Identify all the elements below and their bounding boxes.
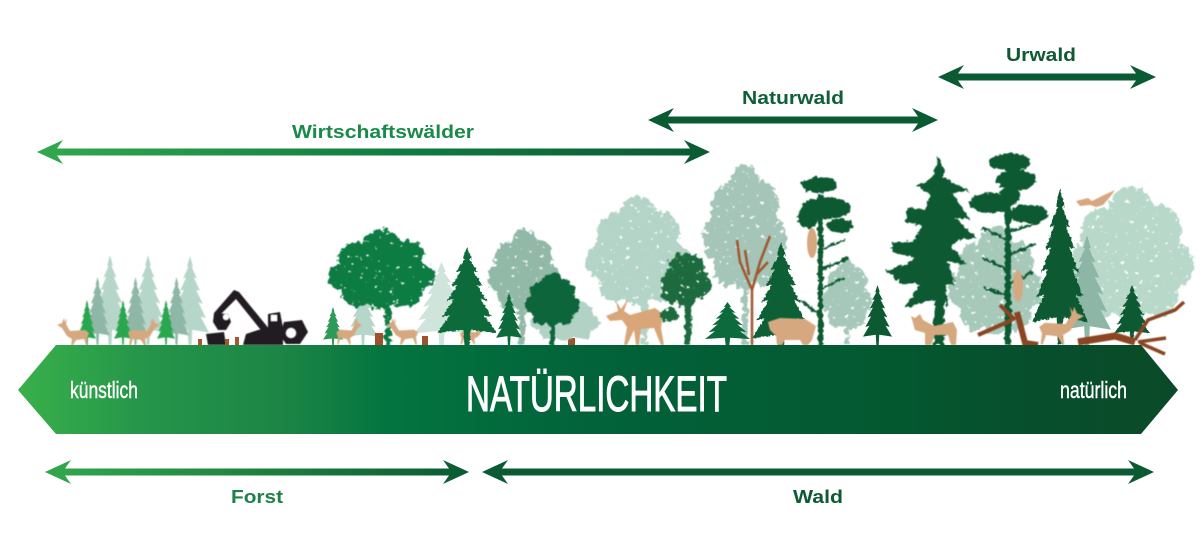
harvester machine — [206, 290, 308, 345]
fallen broken tree — [978, 305, 1038, 345]
huge pale broadleaf — [1068, 186, 1194, 322]
roe deer centre left — [336, 318, 487, 345]
arrow: Urwald range — [938, 65, 1156, 89]
heading: Urwald: Urwald — [1006, 45, 1076, 65]
pale grey broadleaf tall — [703, 164, 787, 345]
pale background conifers left — [92, 255, 209, 345]
stag — [606, 299, 664, 345]
arrow: Naturwald range — [648, 108, 938, 132]
large broadleaf tree — [328, 229, 435, 345]
forest illustration — [18, 153, 1194, 434]
pale conifer centre left — [414, 262, 469, 345]
heading: Naturwald: Naturwald — [742, 88, 844, 108]
pale conifer behind broadleaf — [348, 285, 378, 345]
small conifer — [323, 307, 343, 345]
small dark conifer — [863, 285, 892, 345]
arrow: Wald range — [482, 460, 1154, 484]
dead tree — [737, 236, 770, 345]
squirrel on pine — [807, 228, 817, 258]
mid conifer urwald — [1063, 235, 1111, 345]
heading: Forst: Forst — [231, 487, 283, 507]
dark round broadleaf — [525, 273, 580, 345]
arrow: Wirtschaftswälder range — [37, 140, 710, 164]
heading: Wald: Wald — [793, 487, 843, 507]
dark conifer centre — [437, 247, 497, 347]
squirrel on urwald pine — [1013, 270, 1023, 302]
tree stumps left — [198, 337, 239, 345]
grey broadleaf tree — [488, 229, 560, 345]
tall pine naturwald — [798, 177, 853, 345]
band label right: natürlich — [1060, 377, 1127, 403]
small conifer urwald — [1114, 285, 1150, 341]
deer urwald — [1039, 307, 1084, 344]
low spruce bush — [705, 302, 750, 345]
large pale broadleaf — [586, 196, 690, 345]
mid conifers left — [85, 277, 189, 345]
green young conifers left — [78, 300, 175, 345]
heading: Wirtschaftswälder: Wirtschaftswälder — [292, 122, 474, 142]
arrow: Forst range — [45, 460, 469, 484]
lynx — [911, 314, 957, 345]
dark spruce urwald — [1032, 188, 1088, 344]
dark conifer naturwald — [752, 242, 810, 354]
band title: NATÜRLICHKEIT — [466, 366, 727, 422]
pale tree right of pine — [822, 259, 872, 345]
band label left: künstlich — [70, 377, 138, 403]
roe deer left — [57, 318, 160, 346]
bat — [1076, 190, 1115, 207]
pale broadleaf urwald mid — [948, 226, 1043, 334]
dark small conifer — [496, 293, 522, 345]
sparse deciduous tree — [661, 253, 712, 345]
boar — [768, 318, 816, 345]
large spruce urwald — [885, 157, 977, 345]
fallen tree roots right — [1078, 302, 1184, 354]
band: Natürlichkeit gradient arrow — [18, 345, 1178, 434]
tall pine urwald — [970, 153, 1048, 345]
pale broadleaf low — [530, 296, 600, 341]
tree stumps centre — [375, 333, 575, 345]
